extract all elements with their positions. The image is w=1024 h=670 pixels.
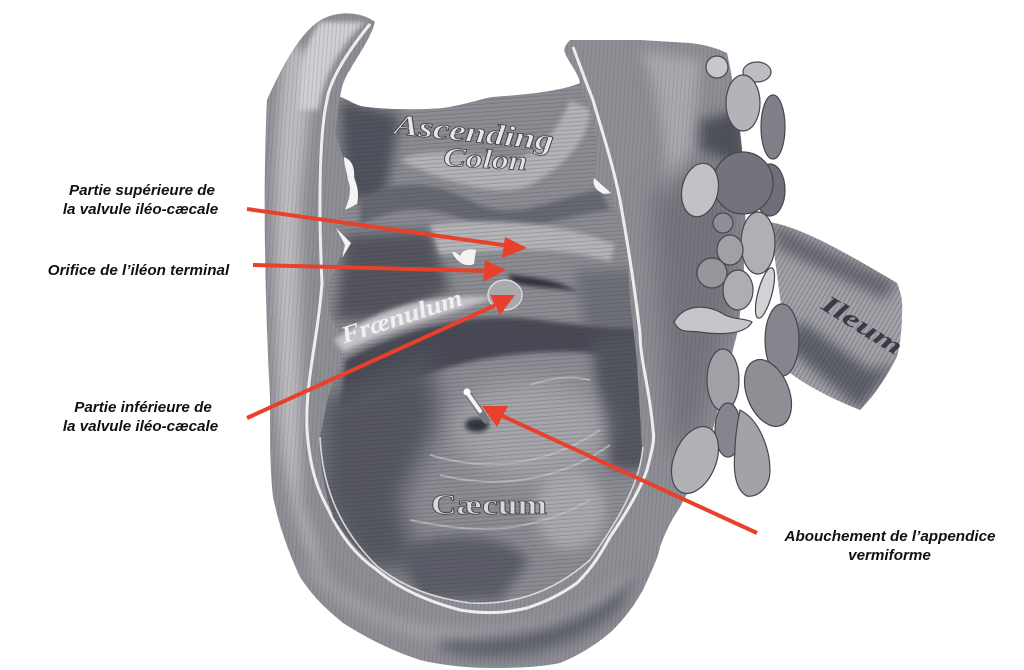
- arrow: partie inférieure: [247, 295, 515, 418]
- colon light arch: [400, 100, 590, 190]
- label: Colon: Colon: [443, 142, 528, 176]
- arrow: partie supérieure: [247, 209, 527, 258]
- right wall light band: [642, 50, 702, 183]
- dark left of valve: [335, 230, 450, 320]
- white scalloped edges: [336, 157, 611, 258]
- light swirl strokes: [410, 378, 610, 529]
- inner white rim line: [320, 437, 643, 603]
- dark right column: [590, 330, 650, 470]
- caption: orifice: Orifice de l’iléon terminal: [48, 262, 230, 279]
- caption: partie inférieure: la valvule iléo-cæcale: [63, 418, 219, 435]
- appendix opening: [464, 388, 489, 432]
- dark left pouch: [320, 350, 440, 570]
- illustration: caecum anatomical engraving: [255, 5, 910, 670]
- label: Fraenulum: Frænulum: [337, 286, 466, 350]
- left wall light band: [275, 40, 330, 590]
- white spot above frenulum: [452, 249, 476, 265]
- central light zone: [455, 380, 605, 480]
- inner cavity of the caecum: [310, 80, 650, 610]
- caption: partie supérieure: la valvule iléo-cæcale: [63, 201, 219, 218]
- label: Caecum: Cæcum: [431, 489, 547, 521]
- top tube light band: [298, 22, 365, 110]
- bottom band light streak: [323, 578, 626, 642]
- caption: partie supérieure: Partie supérieure de: [69, 182, 216, 199]
- ileum tube: [771, 222, 902, 410]
- left wall white line: [307, 24, 654, 613]
- label: Ascending: Ascending: [390, 109, 555, 157]
- valve knob: [488, 280, 522, 310]
- caption: partie inférieure: Partie inférieure de: [74, 399, 212, 416]
- arrow: abouchement: [482, 406, 757, 533]
- label: Ileum: Ileum: [815, 290, 907, 361]
- dark band below frenulum: [340, 317, 650, 410]
- fraenulum fold: [334, 297, 495, 352]
- outer wall of the colon and caecum: [255, 5, 755, 670]
- cluster root shadow: [700, 110, 750, 170]
- appendices epiploicae cluster: [662, 56, 801, 500]
- bottom dark floor: [395, 536, 530, 600]
- colon dark fold: [360, 184, 610, 228]
- dark upper left: [340, 100, 400, 200]
- light band at upper valve lip: [430, 222, 615, 262]
- dark right band: [574, 266, 634, 330]
- caption: abouchement: Abouchement de l’appendice: [784, 528, 996, 545]
- caption: abouchement: vermiforme: [848, 547, 931, 564]
- ileocaecal orifice: [508, 274, 578, 292]
- arrow: orifice: [253, 260, 506, 282]
